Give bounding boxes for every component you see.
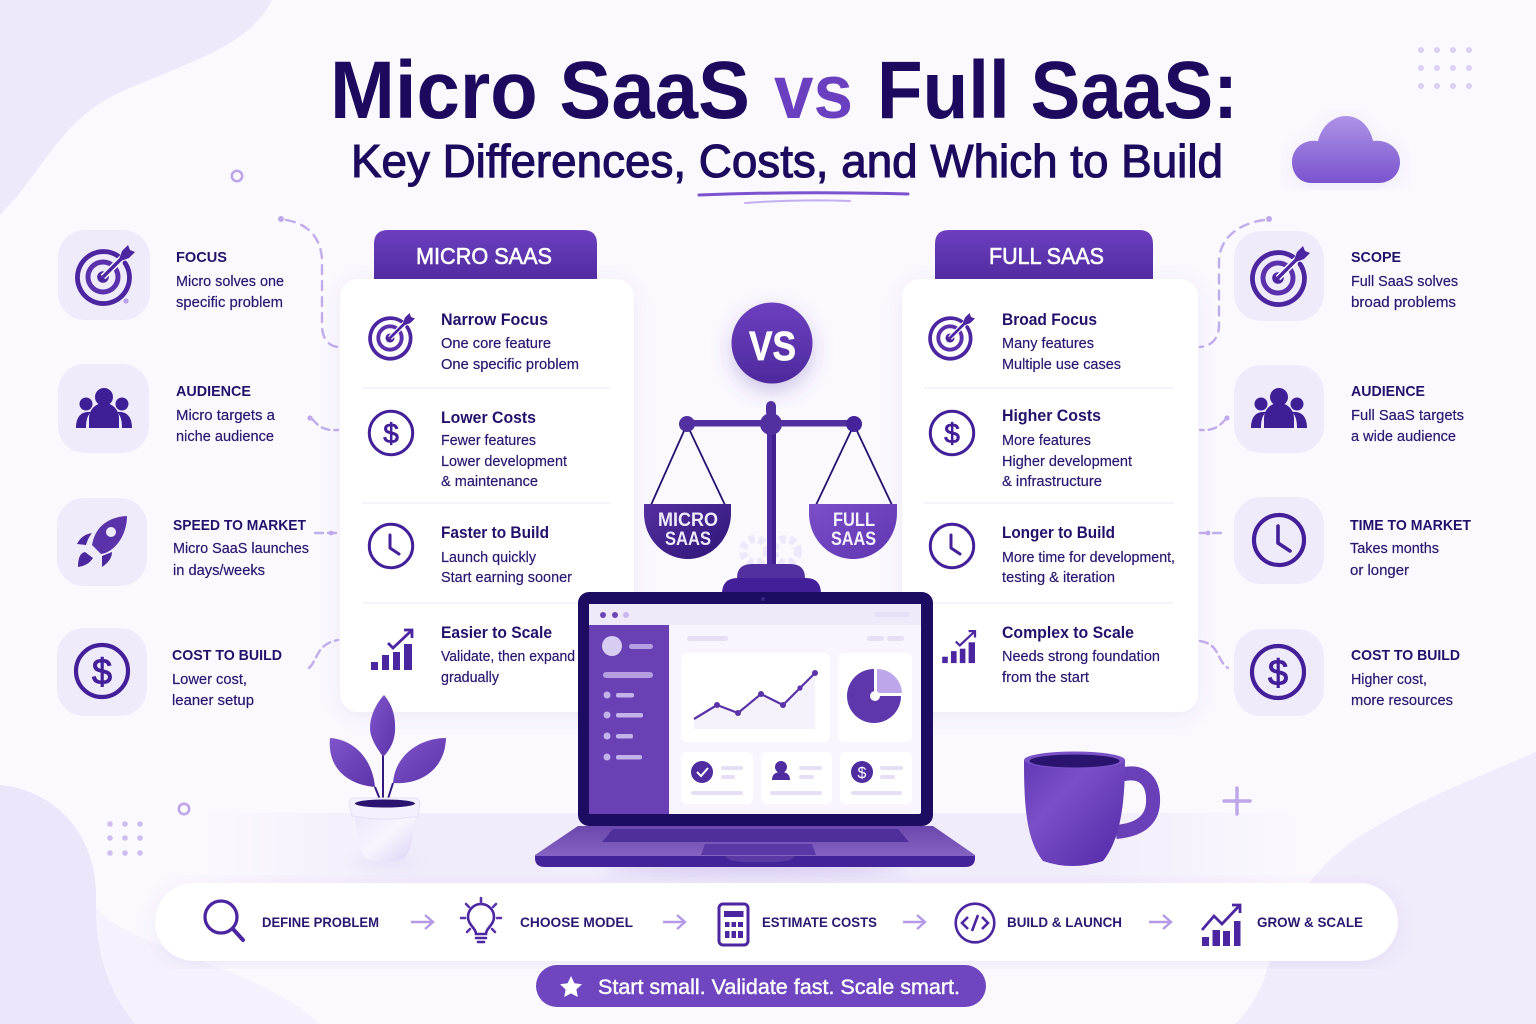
side item: focus: FOCUS [176, 249, 227, 266]
panel: micro saas: One core feature [441, 335, 551, 352]
scale: SAAS [831, 529, 876, 550]
panel: micro saas: Launch quickly [441, 549, 536, 566]
vs badge: VS [749, 323, 796, 369]
process bar: BUILD & LAUNCH [1007, 914, 1122, 930]
panel: micro saas: Faster to Build [441, 523, 549, 542]
panel: micro saas: Start earning sooner [441, 569, 572, 586]
side item: cost full: COST TO BUILD [1351, 647, 1460, 664]
side item: cost full [1234, 629, 1460, 716]
side item: cost full: more resources [1351, 692, 1453, 709]
side item: audience full [1234, 365, 1464, 453]
coffee mug [1024, 752, 1153, 866]
process bar: DEFINE PROBLEM [262, 914, 379, 930]
panel: full saas: FULL SAAS [989, 243, 1104, 269]
pie chart [838, 653, 912, 742]
tagline pill [536, 965, 986, 1007]
panel: full saas: Broad Focus [1002, 310, 1097, 329]
side item: cost micro: leaner setup [172, 692, 254, 709]
side item: audience full: a wide audience [1351, 428, 1456, 445]
panel: micro saas: Lower development [441, 453, 568, 470]
scale: MICRO [658, 510, 718, 531]
process bar: ESTIMATE COSTS [762, 914, 877, 930]
icon: cloud [1292, 116, 1400, 183]
side item: audience micro: niche audience [176, 428, 274, 445]
decoration: dots top right [1418, 47, 1472, 89]
panel: micro saas: Validate, then expand [441, 648, 575, 665]
side item: cost full: Higher cost, [1351, 671, 1427, 688]
side item: cost full: $ [1268, 652, 1288, 693]
side item: audience micro: Micro targets a [176, 407, 276, 424]
panel: full saas: & infrastructure [1002, 473, 1102, 490]
panel: micro saas: One specific problem [441, 356, 579, 373]
side item: scope: Full SaaS solves [1351, 273, 1458, 290]
laptop [535, 592, 975, 873]
panel: full saas: testing & iteration [1002, 569, 1115, 586]
plant [330, 695, 446, 865]
panel: micro saas: Fewer features [441, 432, 536, 449]
side item: cost micro: Lower cost, [172, 671, 247, 688]
side item: speed to market: Micro SaaS launches [173, 540, 309, 557]
title: Full SaaS: [877, 45, 1238, 136]
panel: micro saas: Easier to Scale [441, 623, 552, 642]
panel: full saas: Many features [1002, 335, 1094, 352]
panel: full saas: Higher Costs [1002, 406, 1101, 425]
panel: micro saas: Lower Costs [441, 408, 536, 427]
subtitle: Key Differences, Costs, and Which to Build [351, 135, 1223, 187]
title: vs [774, 50, 853, 135]
side item: speed to market [57, 498, 309, 586]
side item: cost micro [57, 628, 282, 716]
panel: full saas: Longer to Build [1002, 523, 1115, 542]
title [330, 45, 1238, 136]
side item: cost micro: COST TO BUILD [172, 647, 282, 664]
scale: SAAS [665, 529, 711, 550]
decoration: dots bottom left [107, 821, 143, 856]
vs badge [732, 302, 812, 384]
panel: micro saas: Narrow Focus [441, 310, 548, 329]
icon: growth bars [1202, 905, 1240, 946]
side item: cost micro: $ [92, 651, 112, 692]
panel: micro saas [340, 230, 634, 712]
side item: time to market: TIME TO MARKET [1350, 517, 1471, 534]
side item: time to market: Takes months [1350, 540, 1439, 557]
panel: micro saas: & maintenance [441, 473, 538, 490]
tagline pill: Start small. Validate fast. Scale smart. [598, 976, 960, 999]
panel: micro saas: gradually [441, 669, 499, 686]
stat cards [681, 752, 912, 804]
panel: micro saas: MICRO SAAS [416, 243, 552, 269]
side item: scope [1234, 231, 1458, 321]
icon: code [956, 904, 994, 942]
panel: full saas: More time for development, [1002, 549, 1175, 566]
side item: scope: broad problems [1351, 294, 1456, 311]
title: Micro SaaS [330, 45, 750, 136]
connectors: right [1200, 216, 1272, 668]
panel: full saas: Needs strong foundation [1002, 648, 1160, 665]
panel: full saas: Multiple use cases [1002, 356, 1121, 373]
side item: audience full: AUDIENCE [1351, 383, 1425, 400]
side item: focus: Micro solves one [176, 273, 284, 290]
side item: focus: specific problem [176, 294, 283, 311]
panel: full saas [902, 230, 1198, 712]
panel: micro saas: $ [383, 418, 399, 449]
side item: time to market: or longer [1350, 562, 1409, 579]
side item: audience full: Full SaaS targets [1351, 407, 1464, 424]
scale: FULL [833, 510, 875, 531]
line chart [681, 653, 830, 742]
side item: speed to market: SPEED TO MARKET [173, 517, 306, 534]
side item: focus [58, 230, 284, 320]
icon: faint gear [743, 539, 798, 563]
icon: lightbulb [461, 898, 501, 942]
icon: calculator [719, 904, 748, 945]
side item: scope: SCOPE [1351, 249, 1401, 266]
process bar: GROW & SCALE [1257, 914, 1363, 930]
scale [644, 401, 897, 594]
laptop screen [589, 604, 921, 814]
icon: magnifier [205, 901, 243, 940]
side item: time to market [1234, 497, 1471, 584]
panel: full saas: More features [1002, 432, 1091, 449]
process bar [155, 883, 1398, 961]
panel: full saas: $ [944, 418, 960, 449]
connectors: left [278, 216, 338, 668]
side item: speed to market: in days/weeks [173, 562, 265, 579]
panel: full saas: from the start [1002, 669, 1090, 686]
decoration: rings and plus [179, 171, 1250, 814]
side item: audience micro [58, 364, 276, 453]
panel: full saas: Complex to Scale [1002, 623, 1134, 642]
side item: audience micro: AUDIENCE [176, 383, 251, 400]
panel: full saas: Higher development [1002, 453, 1133, 470]
stat cards: $ [858, 765, 867, 782]
process bar: CHOOSE MODEL [520, 914, 633, 930]
